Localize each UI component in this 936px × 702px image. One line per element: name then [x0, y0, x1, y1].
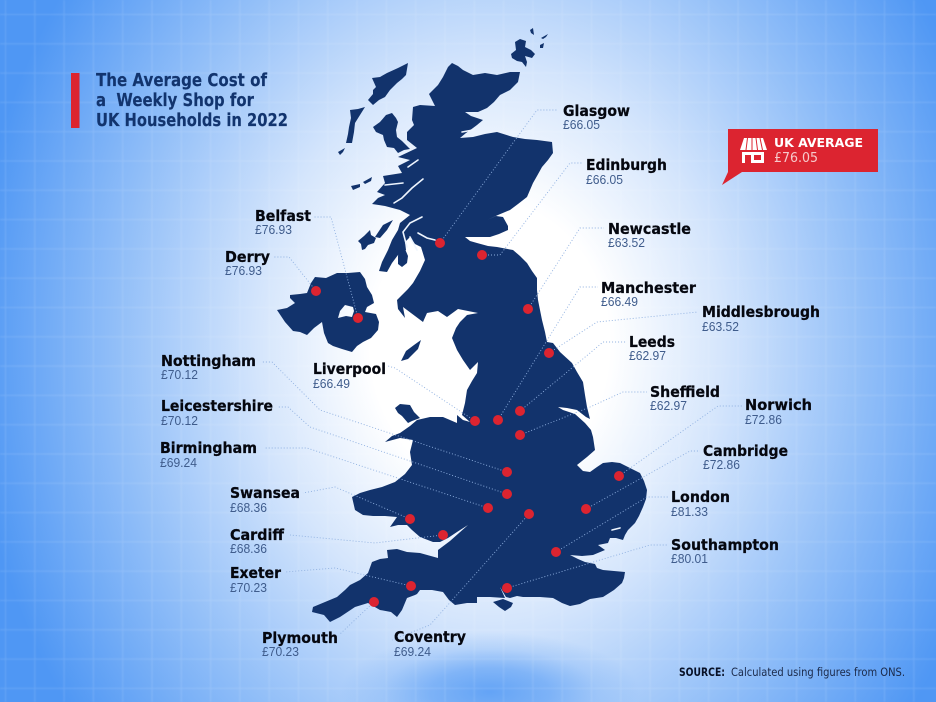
label: Belfast — [255, 207, 311, 237]
title: The Average Cost of — [96, 71, 267, 91]
Uist and Harris — [346, 107, 365, 143]
label: Exeter — [230, 564, 282, 595]
map of the UK — [277, 28, 647, 622]
marker: Liverpool — [470, 416, 480, 426]
Lewis — [368, 63, 408, 105]
label: Leeds — [629, 333, 675, 363]
label: Belfast: £76.93 — [255, 222, 292, 237]
label: Norwich: £72.86 — [745, 412, 782, 427]
label: London: £81.33 — [671, 504, 708, 519]
label: Liverpool: Liverpool — [313, 360, 386, 378]
label: Edinburgh — [586, 156, 667, 187]
accent bar — [71, 73, 80, 128]
marker: Exeter — [406, 581, 416, 591]
label: London — [671, 488, 730, 519]
label: Middlesbrough: £63.52 — [702, 319, 739, 334]
source note: SOURCE: — [679, 665, 725, 679]
Great Britain mainland — [312, 63, 647, 622]
label: Plymouth — [262, 629, 338, 659]
marker: Norwich — [614, 471, 624, 481]
label: Derry: Derry — [225, 248, 270, 266]
Isle of Man — [401, 340, 421, 361]
title — [96, 71, 288, 131]
source note — [679, 665, 905, 679]
label: Newcastle: £63.52 — [608, 235, 645, 250]
callout: UK average: £76.05 — [774, 150, 818, 166]
label: Leeds: £62.97 — [629, 348, 666, 363]
label: Coventry: Coventry — [394, 628, 466, 646]
label: Swansea: £68.36 — [230, 500, 267, 515]
label: Southampton: Southampton — [671, 536, 779, 554]
marker: Glasgow — [435, 238, 445, 248]
marker: Nottingham — [502, 467, 512, 477]
label: Swansea: Swansea — [230, 484, 300, 502]
label: Birmingham — [160, 439, 257, 470]
title: UK Households in 2022 — [96, 111, 288, 131]
marker: Southampton — [502, 583, 512, 593]
label: London: London — [671, 488, 730, 506]
label: Cambridge: £72.86 — [703, 457, 740, 472]
label: Cambridge: Cambridge — [703, 442, 788, 460]
label: Plymouth: Plymouth — [262, 629, 338, 647]
label: Middlesbrough — [702, 303, 820, 334]
label: Derry: £76.93 — [225, 263, 262, 278]
marker: Plymouth — [369, 597, 379, 607]
label: Glasgow: £66.05 — [563, 117, 600, 132]
label: Exeter: Exeter — [230, 564, 282, 582]
label: Norwich — [745, 396, 812, 427]
label: Cardiff: Cardiff — [230, 526, 285, 544]
callout: UK average: UK AVERAGE — [774, 135, 863, 150]
label: Leeds: Leeds — [629, 333, 675, 351]
marker: Cardiff — [438, 530, 448, 540]
label: Nottingham — [161, 352, 256, 382]
label: Derry — [225, 248, 270, 278]
label: Leicestershire — [161, 397, 273, 428]
label: Birmingham: Birmingham — [160, 439, 257, 457]
marker: London — [551, 547, 561, 557]
Jura — [375, 220, 393, 238]
marker: Sheffield — [515, 430, 525, 440]
label: Sheffield: £62.97 — [650, 398, 687, 413]
label: Plymouth: £70.23 — [262, 644, 299, 659]
leader lines — [261, 110, 743, 640]
marker: Birmingham — [483, 503, 493, 513]
label: Nottingham: £70.12 — [161, 367, 198, 382]
label: Glasgow — [563, 102, 630, 132]
label: Newcastle — [608, 220, 691, 250]
label: Liverpool: £66.49 — [313, 376, 350, 391]
label: Belfast: Belfast — [255, 207, 311, 225]
marker: Leicestershire — [502, 489, 512, 499]
marker: Middlesbrough — [544, 348, 554, 358]
label: Southampton — [671, 536, 779, 566]
marker: Swansea — [405, 514, 415, 524]
label: Cambridge — [703, 442, 788, 472]
marker: Belfast — [353, 313, 363, 323]
marker: Coventry — [524, 509, 534, 519]
marker: Cambridge — [581, 504, 591, 514]
label: Birmingham: £69.24 — [160, 455, 197, 470]
label: Edinburgh: Edinburgh — [586, 156, 667, 174]
label: Coventry — [394, 628, 466, 659]
label: Swansea — [230, 484, 300, 515]
city markers — [311, 238, 624, 607]
label: Edinburgh: £66.05 — [586, 172, 623, 187]
label: Cardiff — [230, 526, 285, 556]
marker: Derry — [311, 286, 321, 296]
Arran — [398, 249, 408, 267]
label: Exeter: £70.23 — [230, 580, 267, 595]
label: Leicestershire: Leicestershire — [161, 397, 273, 415]
callout: UK average — [722, 129, 878, 185]
icon: shop — [740, 138, 767, 163]
label: Sheffield — [650, 383, 720, 413]
label: Newcastle: Newcastle — [608, 220, 691, 238]
label: Nottingham: Nottingham — [161, 352, 256, 370]
label: Norwich: Norwich — [745, 396, 812, 414]
label: Manchester: Manchester — [601, 279, 697, 297]
Northern Ireland — [277, 272, 379, 352]
label: Manchester: £66.49 — [601, 294, 638, 309]
label: Cardiff: £68.36 — [230, 541, 267, 556]
label: Middlesbrough: Middlesbrough — [702, 303, 820, 321]
label: Sheffield: Sheffield — [650, 383, 720, 401]
Orkney — [511, 28, 548, 67]
label: Manchester — [601, 279, 697, 309]
label: Southampton: £80.01 — [671, 551, 708, 566]
Isle of Wight — [493, 599, 513, 611]
marker: Leeds — [515, 406, 525, 416]
marker: Edinburgh — [477, 250, 487, 260]
Tiree and Coll — [351, 177, 372, 190]
marker: Manchester — [493, 415, 503, 425]
sea lochs — [385, 130, 620, 530]
label: Leicestershire: £70.12 — [161, 413, 198, 428]
Anglesey — [395, 404, 420, 423]
label: Glasgow: Glasgow — [563, 102, 630, 120]
Skye — [373, 113, 410, 153]
marker: Newcastle — [523, 304, 533, 314]
Barra — [338, 148, 345, 155]
Islay — [358, 230, 376, 250]
source note: Calculated using figures from ONS. — [731, 665, 905, 679]
label: Liverpool — [313, 360, 386, 391]
label: Coventry: £69.24 — [394, 644, 431, 659]
title: a Weekly Shop for — [96, 91, 254, 111]
